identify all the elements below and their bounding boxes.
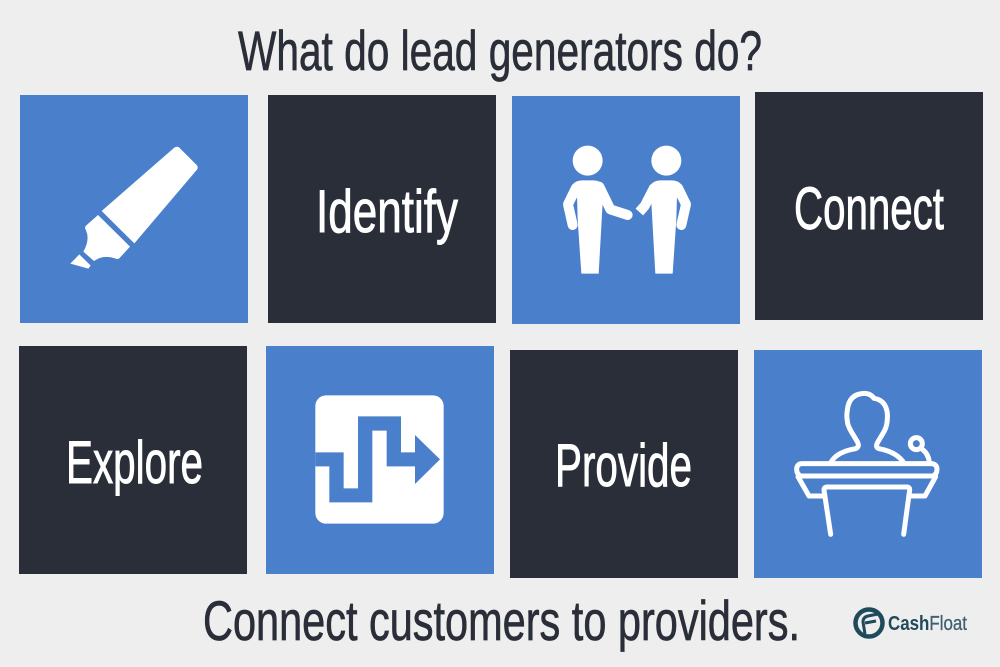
panel: path arrow icon tile bbox=[266, 346, 494, 574]
logo wordmark: CashFloat bbox=[888, 613, 967, 635]
panel: speaker icon tile bbox=[754, 350, 982, 578]
logo: CashFloat bbox=[856, 610, 967, 636]
label: Provide: Provide bbox=[555, 432, 692, 499]
title: What do lead generators do? bbox=[238, 19, 762, 82]
icon: highlighter bbox=[70, 147, 198, 269]
panel: Identify bbox=[268, 95, 496, 323]
panel: highlighter icon tile bbox=[20, 95, 248, 323]
icon: winding path arrow bbox=[315, 395, 444, 524]
icon: two people shaking hands bbox=[568, 146, 686, 274]
panel: Connect bbox=[755, 92, 983, 320]
label: Explore: Explore bbox=[66, 429, 203, 496]
logo mark bbox=[856, 610, 882, 636]
label: Identify: Identify bbox=[316, 178, 458, 245]
icon: speaker at podium bbox=[797, 393, 937, 534]
panel: handshake icon tile bbox=[512, 96, 740, 324]
panel: Provide bbox=[510, 350, 738, 578]
footer caption: Connect customers to providers. bbox=[203, 589, 800, 652]
panel: Explore bbox=[19, 346, 247, 574]
